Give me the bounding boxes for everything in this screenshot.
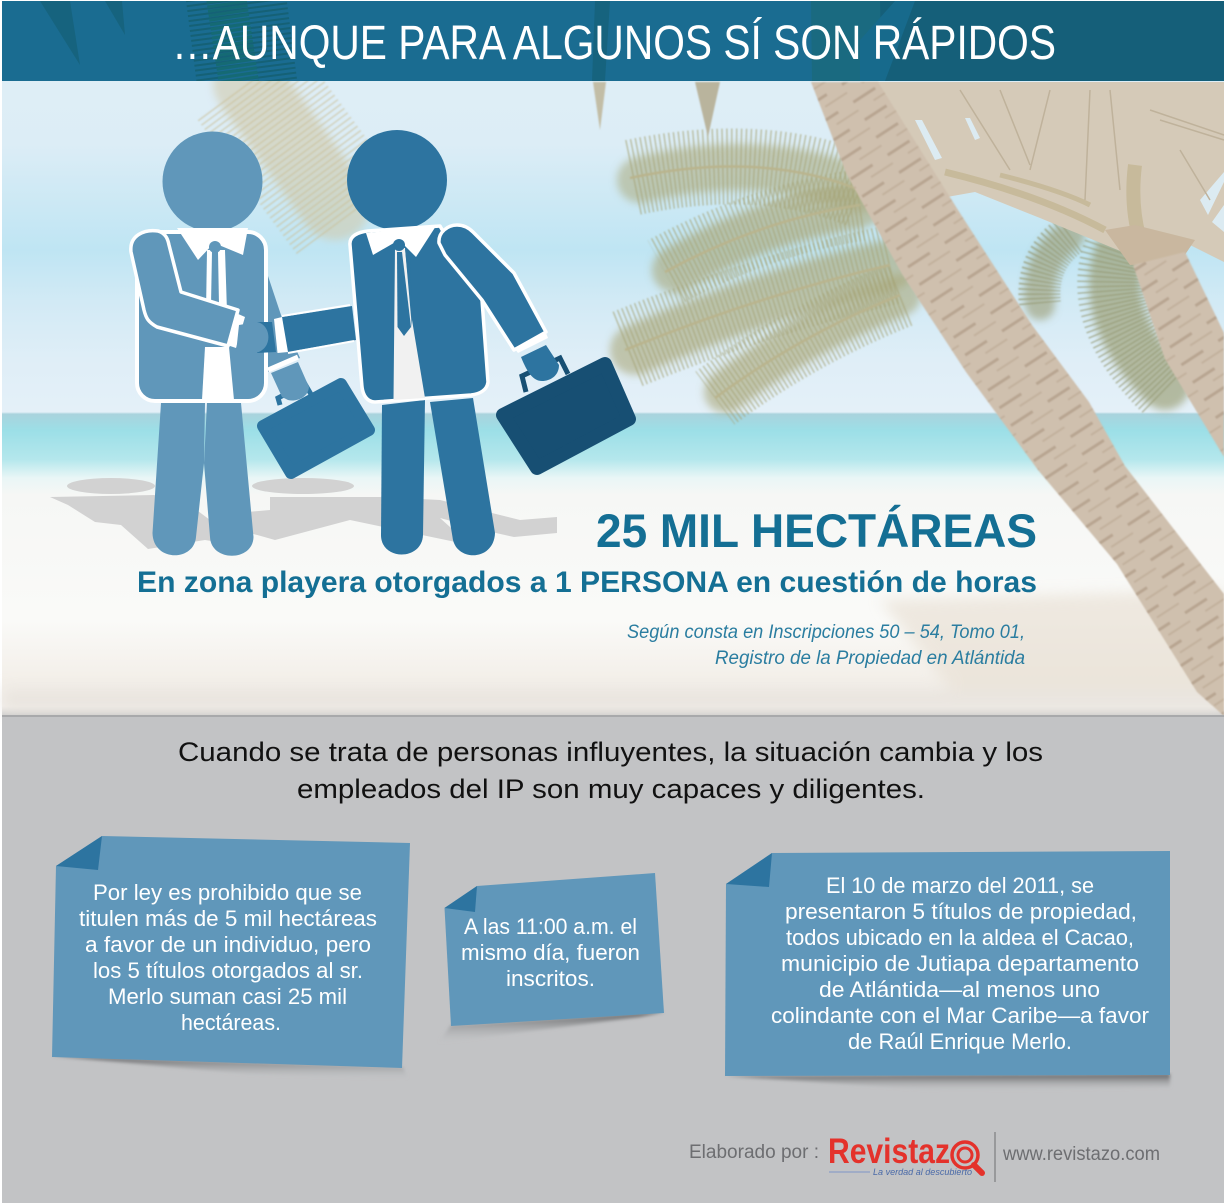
right figure cuff (514, 333, 548, 353)
left figure far arm and hand (266, 270, 309, 400)
note 3 (725, 851, 1170, 1091)
note 3: de Raúl Enrique Merlo. (848, 1029, 1072, 1054)
right figure handshake arm (282, 305, 356, 353)
logo: Revistazo: La verdad al descubierto (873, 1167, 972, 1178)
intro paragraph: empleados del IP son muy capaces y diligentes. (297, 774, 925, 804)
note 1: Por ley es prohibido que se (93, 880, 362, 905)
briefcase left (263, 384, 369, 473)
sand shadow patches (2, 590, 1224, 712)
palm fronds soft mass (248, 83, 1165, 392)
intro paragraph: Cuando se trata de personas influyentes, la situación cambia y los (178, 737, 1043, 767)
note 1: hectáreas. (181, 1010, 281, 1035)
note 1: a favor de un individuo, pero (85, 932, 371, 957)
left figure shirt and collar (177, 228, 248, 400)
note 3: municipio de Jutiapa departamento (781, 951, 1139, 976)
left figure legs (152, 403, 254, 556)
source note (627, 621, 1025, 669)
handshake (236, 317, 288, 353)
shadow of figures on sand (50, 478, 557, 549)
title: …AUNQUE PARA ALGUNOS SÍ SON RÁPIDOS (172, 17, 1056, 70)
figure: left businessman (131, 132, 309, 556)
beach photo background (2, 1, 1224, 717)
logo: Revistazo: Revistaz (828, 1132, 950, 1171)
right figure torso (350, 226, 488, 402)
note 3: El 10 de marzo del 2011, se (826, 873, 1094, 898)
right figure hand (521, 345, 559, 381)
note 3: colindante con el Mar Caribe—a favor (771, 1003, 1149, 1028)
subheadline: En zona playera otorgados a 1 PERSONA en cuestión de horas (137, 566, 1037, 599)
right figure legs (381, 398, 495, 555)
left figure torso (137, 232, 266, 401)
source note: Registro de la Propiedad en Atlántida (715, 647, 1025, 669)
note 2: inscritos. (506, 966, 595, 991)
header band (2, 0, 1224, 90)
right figure raised arm (439, 225, 546, 350)
left figure head (162, 132, 262, 232)
grey lower panel (2, 715, 1224, 1203)
palm fronds barbs (248, 82, 1170, 398)
right figure head (347, 130, 447, 230)
note 1 (52, 836, 410, 1079)
source note: Según consta en Inscripciones 50 – 54, Tomo 01, (627, 621, 1025, 643)
intro paragraph (178, 737, 1043, 804)
note 1: los 5 títulos otorgados al sr. (93, 958, 363, 983)
palm trunk large (811, 82, 1224, 716)
note 2: A las 11:00 a.m. el (464, 914, 637, 939)
note 3: de Atlántida—al menos uno (819, 977, 1100, 1002)
left figure cuff (227, 313, 245, 348)
note 1: Merlo suman casi 25 mil (108, 984, 347, 1009)
footer credit: Elaborado por : (689, 1142, 819, 1163)
note 2 (438, 873, 664, 1043)
note 3: todos ubicado en la aldea el Cacao, (786, 925, 1134, 950)
palm crown (860, 82, 1224, 265)
palm trunk small (1133, 252, 1224, 457)
note 3: presentaron 5 títulos de propiedad, (785, 899, 1137, 924)
footer credit: www.revistazo.com (1002, 1144, 1160, 1165)
briefcase right (503, 358, 629, 468)
right figure shirt, collar and tie (366, 226, 436, 400)
figure: right businessman (282, 130, 559, 555)
note 1: titulen más de 5 mil hectáreas (79, 906, 377, 931)
footer credit (689, 1132, 1160, 1182)
left figure near arm (131, 231, 238, 346)
headline: 25 mil hectáreas: 25 MIL HECTÁREAS (596, 504, 1037, 557)
note 2: mismo día, fueron (461, 940, 640, 965)
